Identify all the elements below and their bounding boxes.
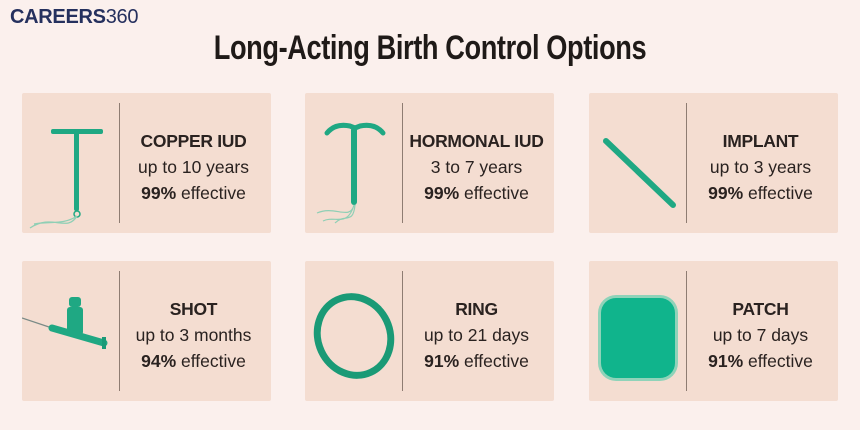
panel: ring [305,261,554,401]
text: shot [136,299,251,371]
text: ring: up to 21 days [424,325,529,345]
title: Long-Acting Birth Control Options [214,29,646,67]
text: shot: 94% effective [141,351,246,371]
icon: patch [598,295,678,381]
text: copper IUD: up to 10 years [138,157,249,177]
panel: implant [589,93,838,233]
icon: implant [603,138,676,208]
text: shot: SHOT [170,299,217,319]
icon: copper IUD [30,129,103,228]
logo: CAREERS360 [10,6,138,28]
text: ring: RING [455,299,498,319]
text: hormonal IUD [409,131,544,203]
text: hormonal IUD: 3 to 7 years [431,157,522,177]
text: implant: up to 3 years [710,157,811,177]
text: patch [708,299,813,371]
icon: shot [22,297,108,349]
text: ring [424,299,529,371]
panel: hormonal IUD [305,93,554,233]
text: implant [708,131,813,203]
text: implant: IMPLANT [723,131,798,151]
text: implant: 99% effective [708,183,813,203]
text: copper IUD: COPPER IUD [141,131,246,151]
text: hormonal IUD: HORMONAL IUD [409,131,544,151]
text: hormonal IUD: 99% effective [424,183,529,203]
icon: ring [314,293,394,379]
text: patch: PATCH [732,299,789,319]
text: patch: 91% effective [708,351,813,371]
text: copper IUD: 99% effective [141,183,246,203]
text: ring: 91% effective [424,351,529,371]
text: shot: up to 3 months [136,325,251,345]
panel: patch [589,261,838,401]
icon: hormonal IUD [316,122,386,224]
panel: shot [22,261,271,401]
text: copper IUD [138,131,249,203]
panel: copper IUD [22,93,271,233]
text: patch: up to 7 days [713,325,808,345]
